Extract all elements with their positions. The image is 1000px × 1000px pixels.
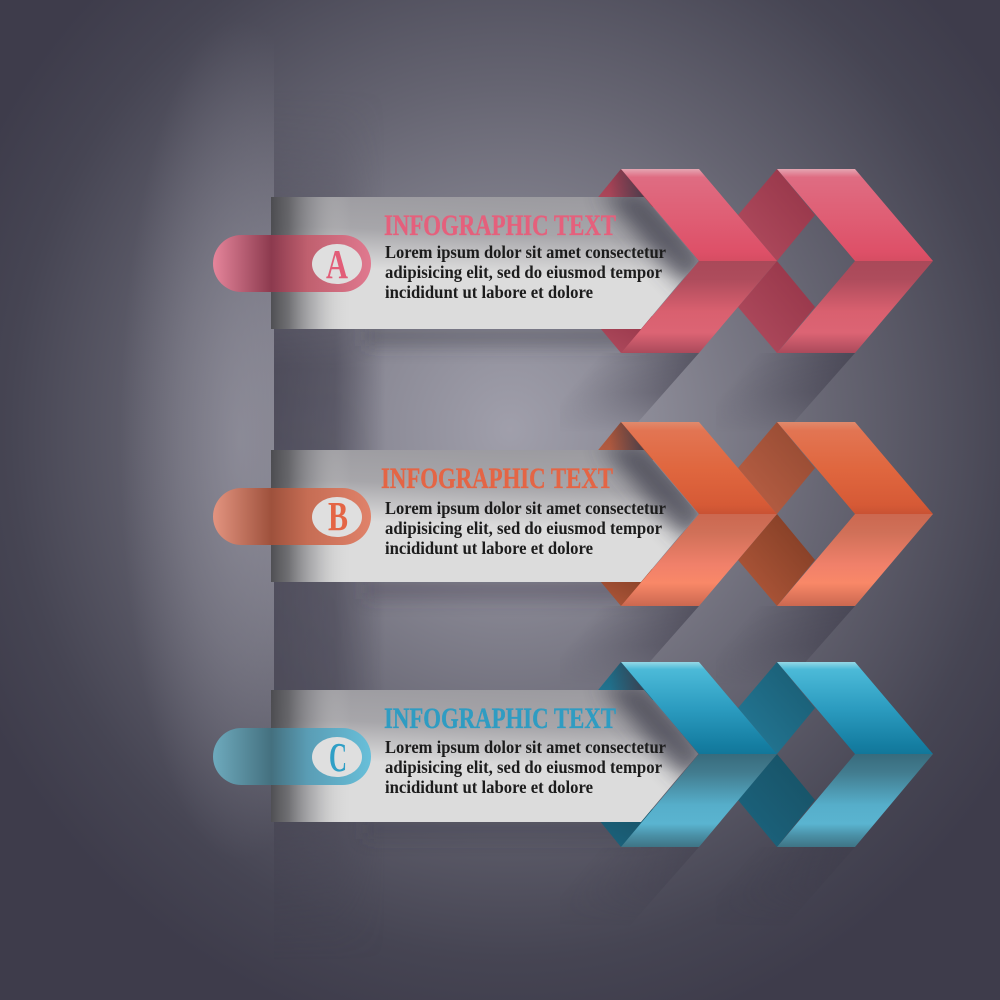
card C (271, 683, 710, 822)
letter badge B (312, 497, 362, 537)
body text B (385, 498, 666, 558)
title C: INFOGRAPHIC TEXT (384, 702, 616, 735)
body text C: incididunt ut labore et dolore (385, 777, 593, 797)
panel: ribbon C (213, 662, 933, 851)
letter badge A (312, 244, 362, 284)
chevron bands C (621, 662, 933, 847)
body text B: Lorem ipsum dolor sit amet consectetur (385, 498, 666, 518)
body text C: adipisicing elit, sed do eiusmod tempor (385, 757, 662, 777)
title A: INFOGRAPHIC TEXT (384, 209, 616, 242)
ribbon shadow A (582, 353, 855, 422)
pill A (213, 235, 371, 292)
letter A: A (326, 241, 348, 287)
body text C (385, 737, 666, 797)
left folds A (590, 169, 660, 353)
body text A (385, 242, 666, 302)
letter badge C (312, 737, 362, 777)
title B: INFOGRAPHIC TEXT (381, 462, 613, 495)
middle folds A (738, 169, 815, 353)
card B (271, 443, 710, 582)
left folds C (590, 662, 660, 847)
body text A: incididunt ut labore et dolore (385, 282, 593, 302)
left folds B (590, 422, 660, 606)
body text C: Lorem ipsum dolor sit amet consectetur (385, 737, 666, 757)
body text A: Lorem ipsum dolor sit amet consectetur (385, 242, 666, 262)
pill B (213, 488, 371, 545)
ribbon shadow C (688, 847, 698, 851)
panel: ribbon B (213, 422, 933, 691)
ribbon shadow B (592, 606, 855, 668)
middle folds C (738, 662, 815, 847)
chevron bands B (621, 422, 933, 606)
panel: ribbon A (213, 169, 933, 438)
body text B: adipisicing elit, sed do eiusmod tempor (385, 518, 662, 538)
letter B: B (328, 493, 348, 539)
card A (271, 190, 710, 329)
middle folds B (738, 422, 815, 606)
body text B: incididunt ut labore et dolore (385, 538, 593, 558)
pill C (213, 728, 371, 785)
body text A: adipisicing elit, sed do eiusmod tempor (385, 262, 662, 282)
letter C: C (329, 734, 347, 780)
chevron bands A (621, 169, 933, 353)
